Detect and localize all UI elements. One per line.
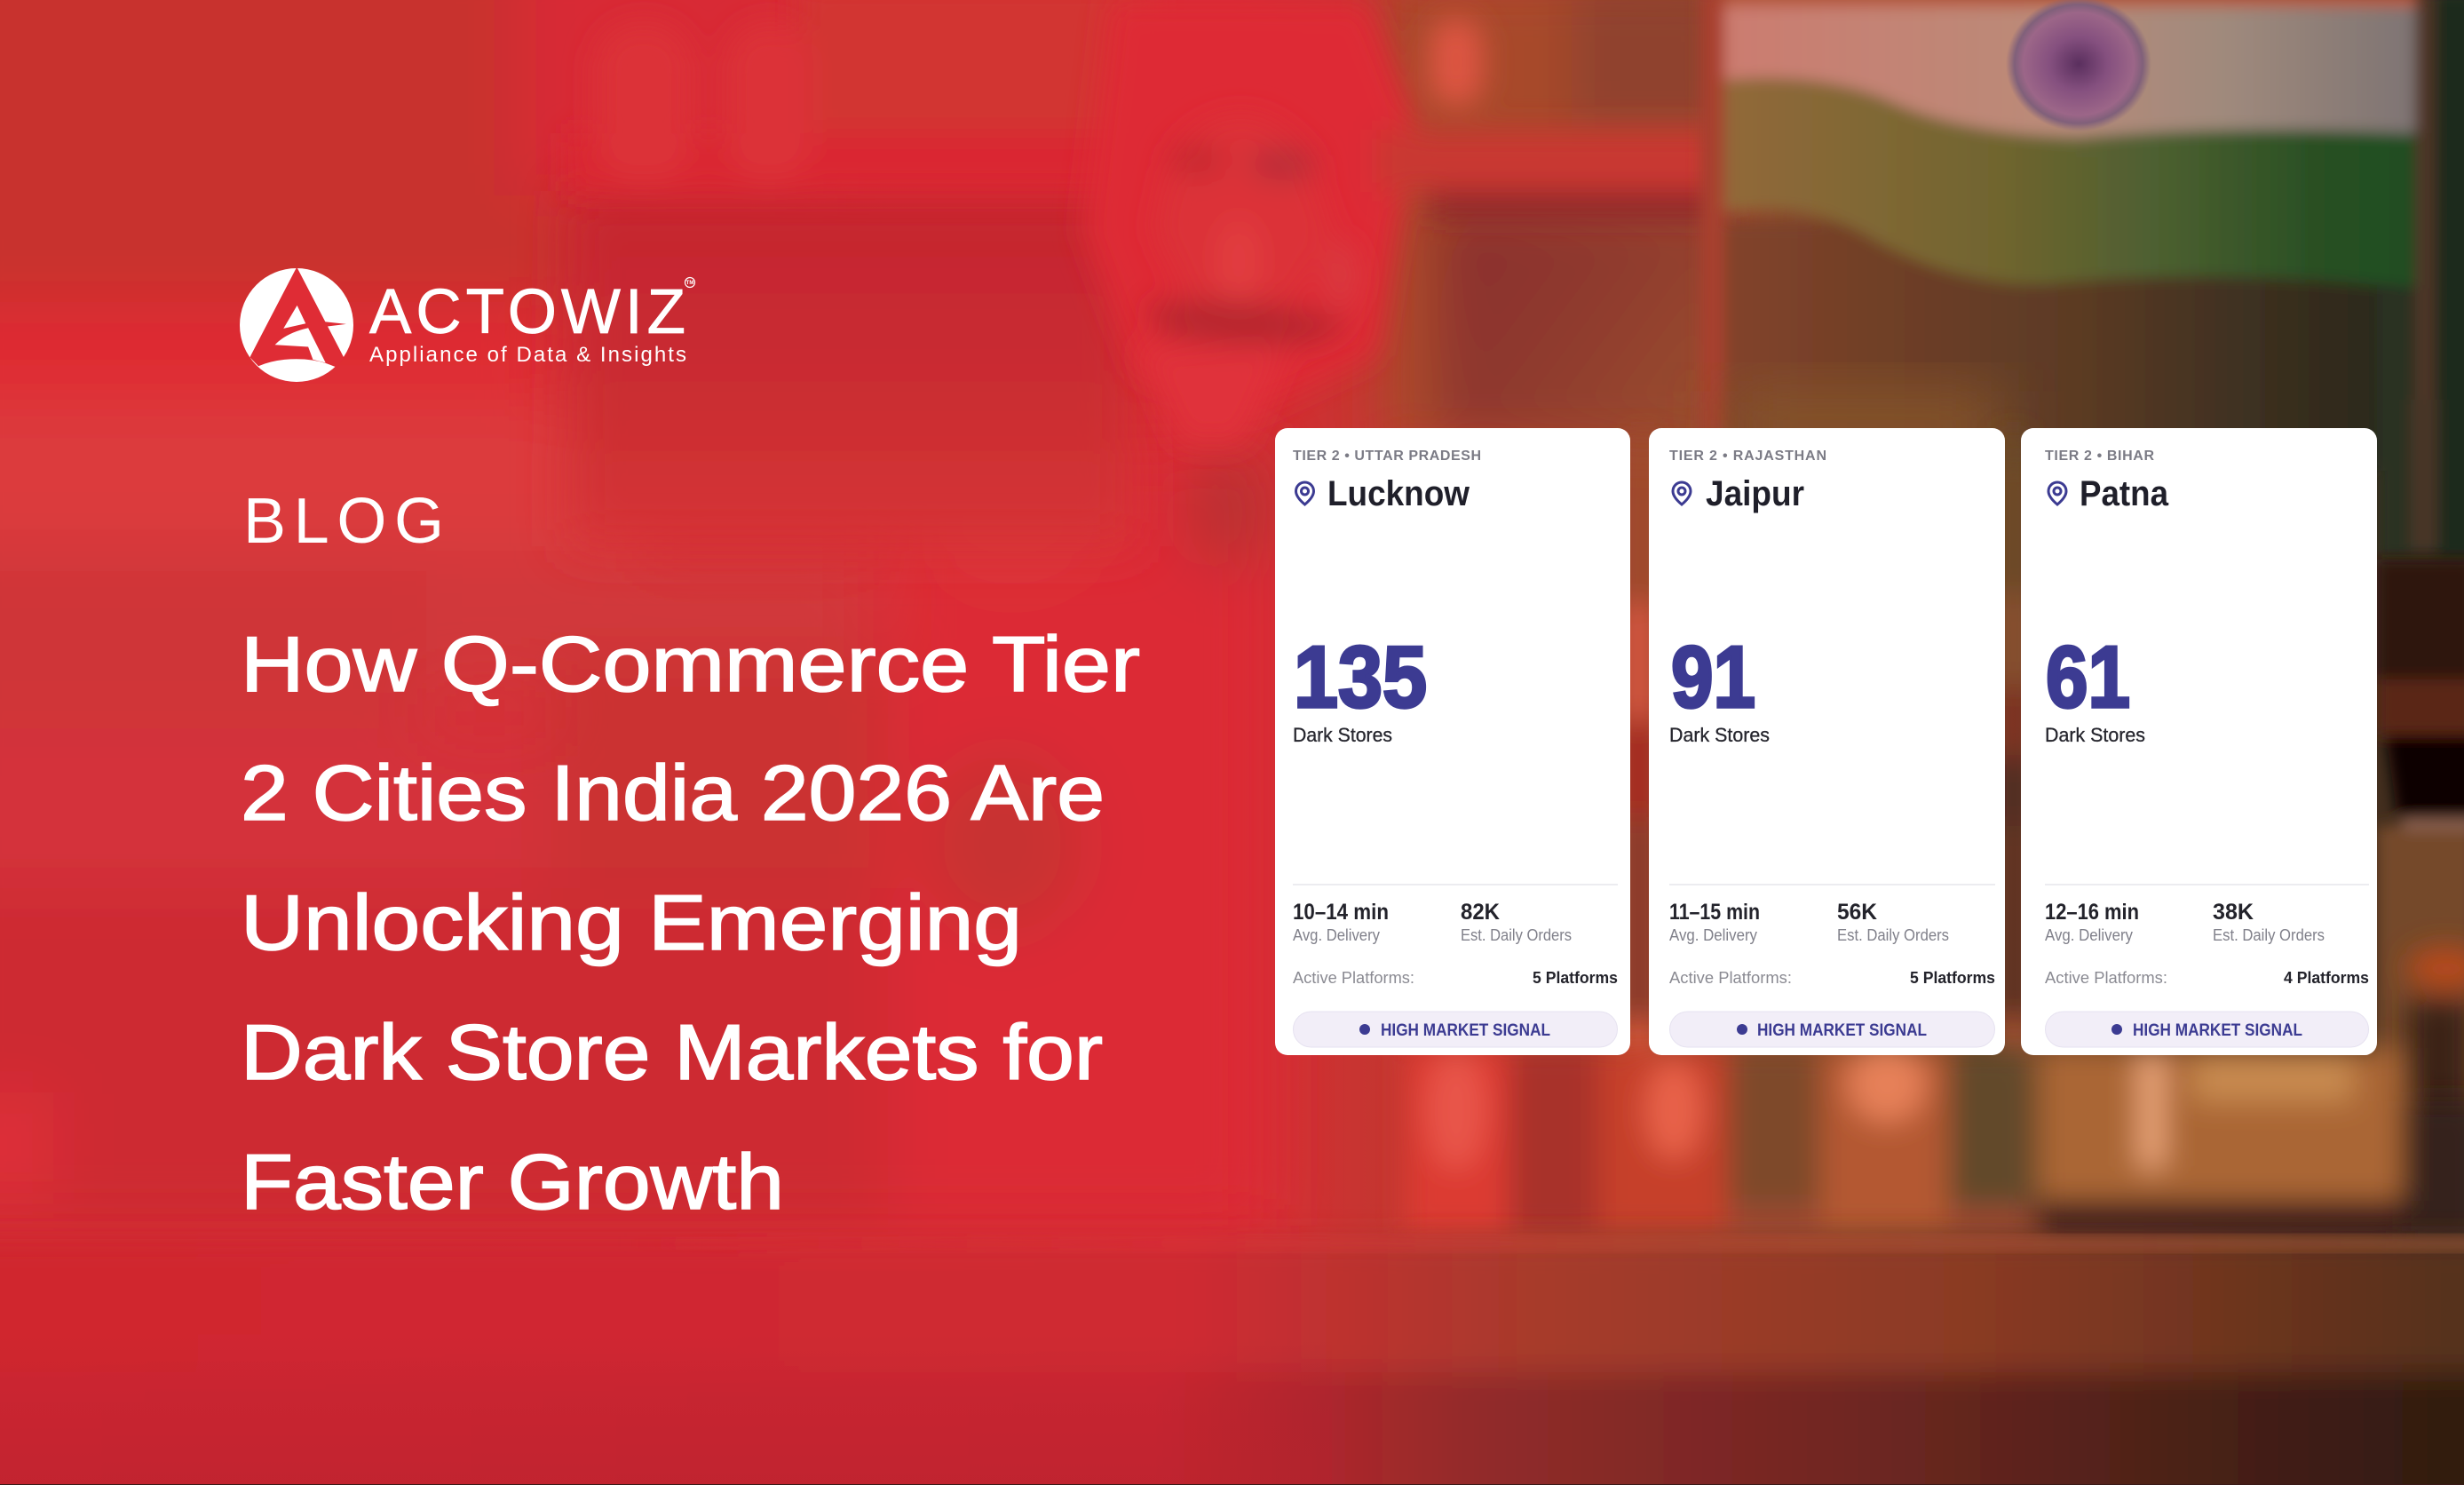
orders stat [2213, 900, 2325, 944]
icon: logo emblem [240, 267, 353, 382]
active platforms row: 5 Platforms [1910, 969, 1995, 987]
count label: Dark Stores [1669, 724, 1770, 746]
orders stat: Est. Daily Orders [1837, 926, 1949, 944]
icon: map pin [2048, 482, 2066, 504]
delivery stat: 12–16 min [2045, 900, 2139, 925]
active platforms row: 5 Platforms [1533, 969, 1618, 987]
trademark mark: TM [686, 281, 693, 286]
signal pill [1293, 1012, 1618, 1047]
signal pill: HIGH MARKET SIGNAL [2133, 1021, 2302, 1040]
title: Dark Store Markets for [241, 1008, 1103, 1096]
title: Unlocking Emerging [241, 878, 1022, 966]
signal pill [1669, 1012, 1994, 1047]
orders stat [1837, 900, 1949, 944]
signal pill: HIGH MARKET SIGNAL [1381, 1021, 1550, 1040]
active platforms row: Active Platforms: [1669, 969, 1792, 987]
tier label: TIER 2 • UTTAR PRADESH [1293, 449, 1481, 464]
delivery stat: Avg. Delivery [1293, 926, 1380, 944]
active platforms row: 4 Platforms [2284, 969, 2369, 987]
title: Faster Growth [241, 1138, 784, 1226]
signal pill [2046, 1012, 2369, 1047]
signal pill: HIGH MARKET SIGNAL [1757, 1021, 1927, 1040]
city name: Patna [2080, 474, 2169, 513]
icon: map pin [1296, 482, 1314, 504]
active platforms row [1669, 969, 1995, 987]
active platforms row [1293, 969, 1618, 987]
trademark mark [685, 277, 694, 288]
tier label: TIER 2 • RAJASTHAN [1669, 449, 1826, 464]
shelf products [1405, 1044, 2464, 1252]
count label: Dark Stores [2045, 724, 2145, 746]
panel: Jaipur card [1649, 428, 2005, 1055]
blog label: BLOG [243, 486, 444, 557]
dark store count: 91 [1671, 628, 1755, 726]
city name: Lucknow [1327, 474, 1470, 513]
tier label: TIER 2 • BIHAR [2045, 449, 2154, 464]
delivery stat: Avg. Delivery [1669, 926, 1757, 944]
icon: map pin [1673, 482, 1691, 504]
dark store count: 135 [1294, 628, 1427, 726]
delivery stat: Avg. Delivery [2045, 926, 2133, 944]
delivery stat [1293, 900, 1389, 944]
logo: Actowiz [240, 267, 694, 382]
counter [0, 1239, 2464, 1485]
delivery stat [1669, 900, 1760, 944]
active platforms row [2045, 969, 2369, 987]
title: How Q-Commerce Tier [241, 620, 1140, 708]
area behind and between cards [1625, 435, 2024, 1066]
panel: Patna card [2021, 428, 2377, 1055]
active platforms row: Active Platforms: [2045, 969, 2167, 987]
orders stat: 82K [1461, 900, 1500, 925]
dark store count: 61 [2046, 628, 2130, 726]
delivery stat: 10–14 min [1293, 900, 1389, 925]
orders stat [1461, 900, 1572, 944]
delivery stat: 11–15 min [1669, 900, 1760, 925]
panel: Lucknow card [1275, 428, 1630, 1055]
logo wordmark: ACTOWIZ [369, 277, 685, 347]
title: 2 Cities India 2026 Are [241, 749, 1105, 837]
orders stat: Est. Daily Orders [1461, 926, 1572, 944]
orders stat: 56K [1837, 900, 1877, 925]
count label: Dark Stores [1293, 724, 1392, 746]
orders stat: Est. Daily Orders [2213, 926, 2325, 944]
title [241, 620, 1140, 1226]
delivery stat [2045, 900, 2139, 944]
flag and wall behind cards [1700, 0, 2464, 560]
city name: Jaipur [1706, 474, 1804, 513]
logo tagline: Appliance of Data & Insights [369, 343, 686, 367]
orders stat: 38K [2213, 900, 2254, 925]
active platforms row: Active Platforms: [1293, 969, 1414, 987]
